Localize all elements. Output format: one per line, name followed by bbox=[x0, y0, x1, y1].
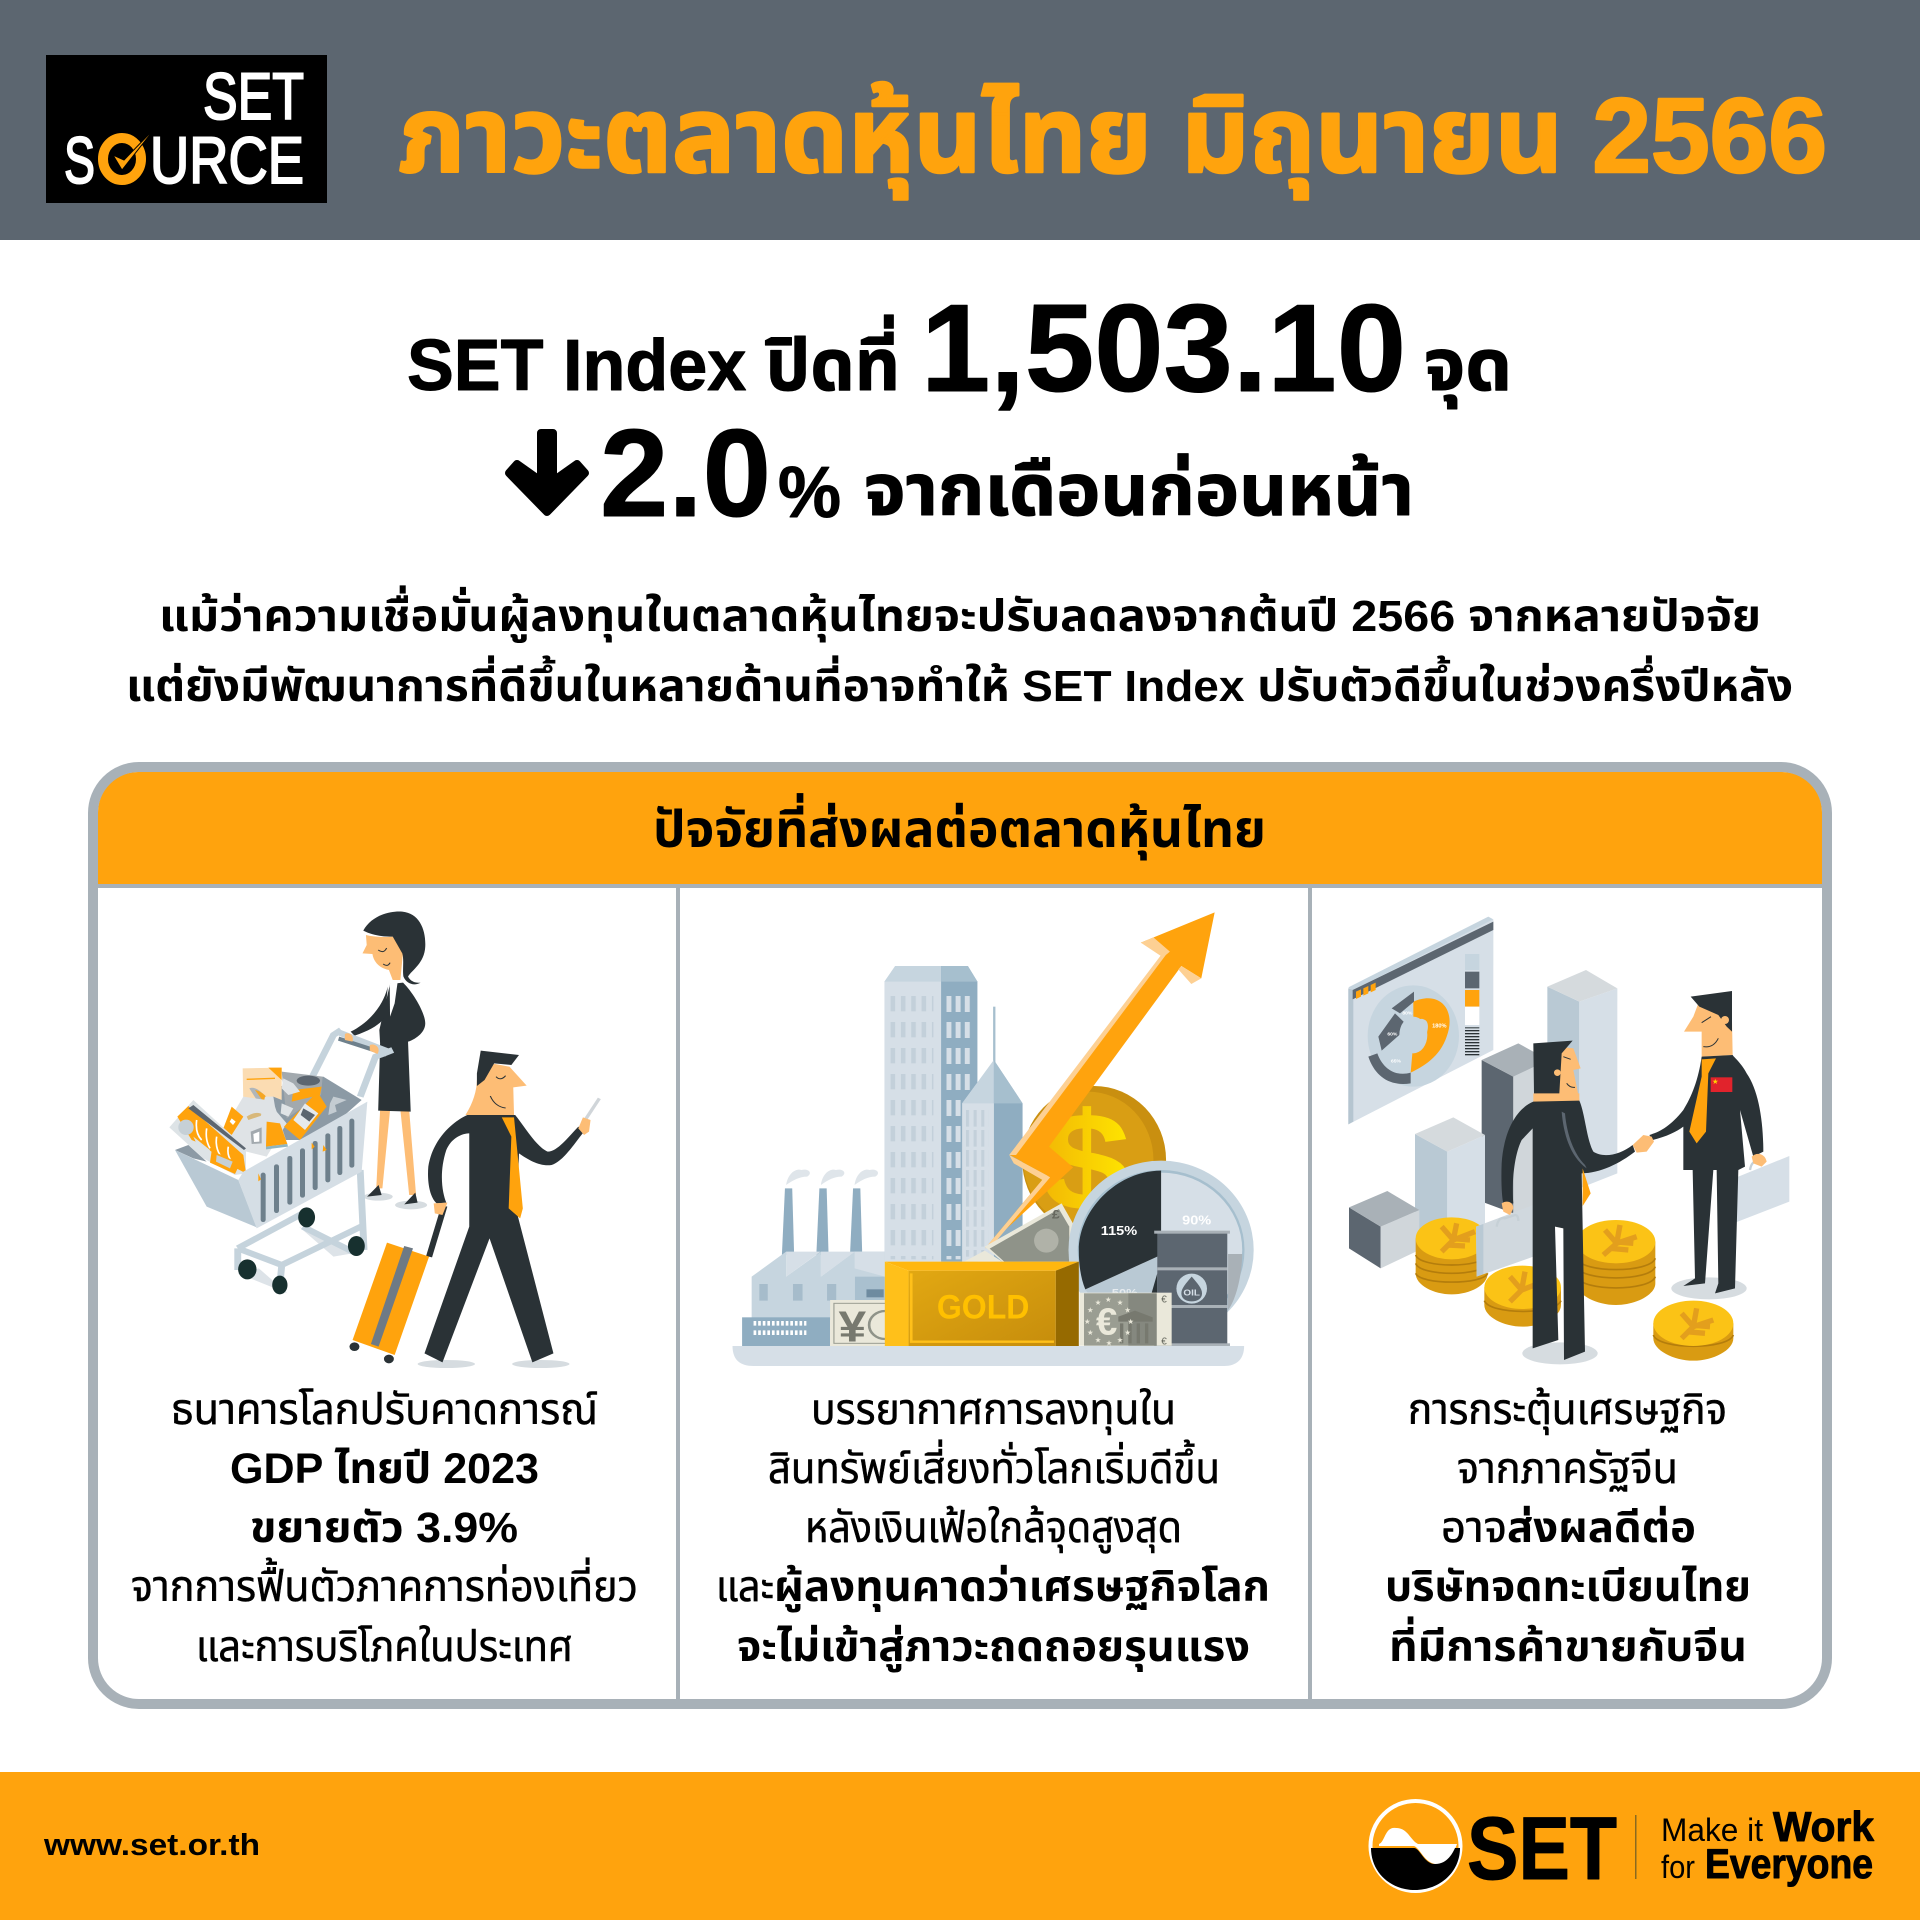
column text: Thai GDP: และการบริโภคในประเทศ bbox=[196, 1623, 573, 1671]
logo: SET: Everyone bbox=[1705, 1840, 1873, 1887]
euro banknote: ★ bbox=[1117, 1336, 1124, 1345]
column text: China stimulus: อาจ bbox=[1441, 1504, 1507, 1552]
logo: SET: SET bbox=[1467, 1798, 1617, 1898]
column text: risk assets bbox=[716, 1386, 1270, 1672]
second tower bbox=[962, 1007, 1023, 1262]
donut chart: 180% bbox=[1432, 1023, 1447, 1029]
summary paragraph: แม้ว่าความเชื่อมั่นผู้ลงทุนในตลาดหุ้นไทยจะปรับลดลงจากต้นปี 2566 จากหลายปัจจัย bbox=[159, 585, 1761, 643]
column text: China stimulus: การกระตุ้นเศรษฐกิจ bbox=[1408, 1386, 1727, 1435]
euro banknote: ★ bbox=[1117, 1298, 1124, 1307]
yen banknote: ¥ bbox=[838, 1303, 866, 1351]
donut chart: 60% bbox=[1387, 1032, 1398, 1038]
headline: monthly change: จากเดือนก่อนหน้า bbox=[864, 451, 1414, 531]
base platform bbox=[733, 1346, 1244, 1366]
column text: China stimulus: ส่งผลดีต่อ bbox=[1507, 1504, 1696, 1552]
logo: SET SOURCE: URCE bbox=[150, 123, 304, 197]
man right bbox=[1649, 991, 1789, 1299]
icon: shoppers with cart and suitcase bbox=[169, 912, 599, 1368]
man left bbox=[1476, 1041, 1635, 1364]
man with suitcase bbox=[349, 1051, 599, 1368]
column text: risk assets: จะไม่เข้าสู่ภาวะถดถอยรุนแรง bbox=[737, 1623, 1250, 1672]
gold bar bbox=[885, 1262, 1079, 1346]
icon: investment assets with rising arrow bbox=[733, 912, 1254, 1366]
woman bbox=[351, 912, 427, 1209]
column text: Thai GDP: ขยายตัว 3.9% bbox=[250, 1504, 518, 1552]
column text: risk assets: และ bbox=[716, 1563, 774, 1611]
euro banknote: ★ bbox=[1095, 1298, 1102, 1307]
tilted banknotes bbox=[964, 1203, 1074, 1262]
euro banknote: ★ bbox=[1084, 1317, 1091, 1326]
skyscraper bbox=[884, 966, 977, 1262]
column text: risk assets: บรรยากาศการลงทุนใน bbox=[811, 1386, 1176, 1435]
column text: risk assets: ผู้ลงทุนคาดว่าเศรษฐกิจโลก bbox=[774, 1563, 1270, 1612]
header bar bbox=[0, 0, 1920, 240]
donut chart: 65% bbox=[1391, 1059, 1402, 1065]
summary paragraph: แต่ยังมีพัฒนาการที่ดีขึ้นในหลายด้านที่อาจทำให้ SET Index ปรับตัวดีขึ้นในช่วงครึ่งปีหลัง bbox=[126, 655, 1793, 711]
oil barrel: OIL bbox=[1183, 1288, 1200, 1297]
euro banknote: ★ bbox=[1087, 1306, 1094, 1315]
gauge pie chart: 50% bbox=[1112, 1286, 1138, 1299]
column text: risk assets: สินทรัพย์เสี่ยงทั่วโลกเริ่มดีขึ้น bbox=[768, 1439, 1220, 1493]
headline: SET Index close: 1,503.10 bbox=[921, 280, 1406, 418]
gauge pie chart: 90% bbox=[1182, 1214, 1211, 1227]
euro banknote: ★ bbox=[1087, 1328, 1094, 1337]
rising arrow bbox=[985, 912, 1215, 1248]
logo: SET SOURCE bbox=[46, 55, 327, 203]
icon: down arrow bbox=[509, 433, 585, 512]
logo: SET: Make it bbox=[1661, 1812, 1763, 1848]
handshake bbox=[1633, 1135, 1654, 1153]
panel heading bar: ปัจจัยที่ส่งผลต่อตลาดหุ้นไทย bbox=[653, 793, 1266, 860]
icon: business handshake with bars and yuan coins bbox=[1348, 917, 1789, 1364]
euro banknote bbox=[1079, 1293, 1172, 1348]
donut chart bbox=[1368, 985, 1459, 1087]
logo: SET SOURCE: S bbox=[64, 123, 95, 197]
shopping basket with goods bbox=[169, 1068, 367, 1228]
column text: Thai GDP: จากการฟื้นตัวภาคการท่องเที่ยว bbox=[131, 1557, 638, 1611]
donut chart: 80% bbox=[1402, 1010, 1413, 1016]
headline: SET Index close: SET Index ปิดที่ bbox=[407, 315, 900, 406]
euro banknote: ★ bbox=[1127, 1317, 1134, 1326]
column text: China stimulus bbox=[1385, 1386, 1751, 1671]
yen banknote bbox=[830, 1300, 901, 1351]
euro banknote: € bbox=[1096, 1300, 1117, 1343]
euro banknote: € bbox=[1161, 1337, 1167, 1348]
gold dollar coin bbox=[1022, 1084, 1166, 1240]
euro banknote: ★ bbox=[1105, 1295, 1112, 1304]
column text: China stimulus: ที่มีการค้าขายกับจีน bbox=[1389, 1616, 1747, 1671]
euro banknote: ★ bbox=[1124, 1328, 1131, 1337]
chart legend bbox=[1465, 954, 1479, 1056]
headline: monthly change bbox=[509, 405, 1414, 543]
euro banknote: ★ bbox=[1095, 1336, 1102, 1345]
gold dollar coin: $ bbox=[1042, 1084, 1131, 1240]
headline: SET Index close bbox=[407, 280, 1512, 418]
gauge pie chart bbox=[1068, 1161, 1254, 1339]
column text: China stimulus: บริษัทจดทะเบียนไทย bbox=[1385, 1563, 1751, 1611]
column text: Thai GDP: ธนาคารโลกปรับคาดการณ์ bbox=[171, 1386, 598, 1434]
gauge pie chart: 115% bbox=[1101, 1224, 1137, 1238]
headline: SET Index close: จุด bbox=[1424, 326, 1512, 409]
footer bar bbox=[0, 1772, 1920, 1920]
logo: SET bbox=[1370, 1798, 1875, 1898]
euro banknote: € bbox=[1161, 1294, 1167, 1305]
logo: SET: Work bbox=[1773, 1803, 1875, 1850]
headline: monthly change: 2.0 bbox=[600, 405, 771, 543]
euro banknote: ★ bbox=[1124, 1306, 1131, 1315]
oil barrel bbox=[1154, 1231, 1230, 1346]
logo: SET: for bbox=[1661, 1849, 1695, 1885]
man right: ★ bbox=[1712, 1077, 1719, 1086]
column text: China stimulus: จากภาครัฐจีน bbox=[1457, 1445, 1678, 1493]
factory bbox=[742, 1170, 885, 1346]
panel heading bar bbox=[98, 772, 1822, 885]
isometric bars bbox=[1349, 970, 1617, 1268]
yuan coin stacks bbox=[1416, 1217, 1733, 1361]
tilted banknotes: £ bbox=[1052, 1207, 1061, 1221]
headline: monthly change: % bbox=[778, 453, 841, 533]
logo: SET SOURCE: SET bbox=[203, 59, 304, 133]
dashboard screen bbox=[1348, 917, 1493, 1124]
euro banknote: ★ bbox=[1106, 1339, 1113, 1348]
gold bar: GOLD bbox=[937, 1287, 1029, 1326]
cart frame bbox=[238, 1030, 393, 1294]
column text: Thai GDP: GDP ไทยปี 2023 bbox=[230, 1445, 539, 1493]
website: www.set.or.th bbox=[43, 1827, 260, 1862]
column text: risk assets: หลังเงินเฟ้อใกล้จุดสูงสุด bbox=[805, 1504, 1182, 1553]
panel: factors bbox=[93, 767, 1827, 1708]
title: ภาวะตลาดหุ้นไทย มิถุนายน 2566 bbox=[398, 77, 1827, 200]
summary paragraph bbox=[126, 585, 1793, 711]
column text: Thai GDP bbox=[131, 1386, 638, 1671]
